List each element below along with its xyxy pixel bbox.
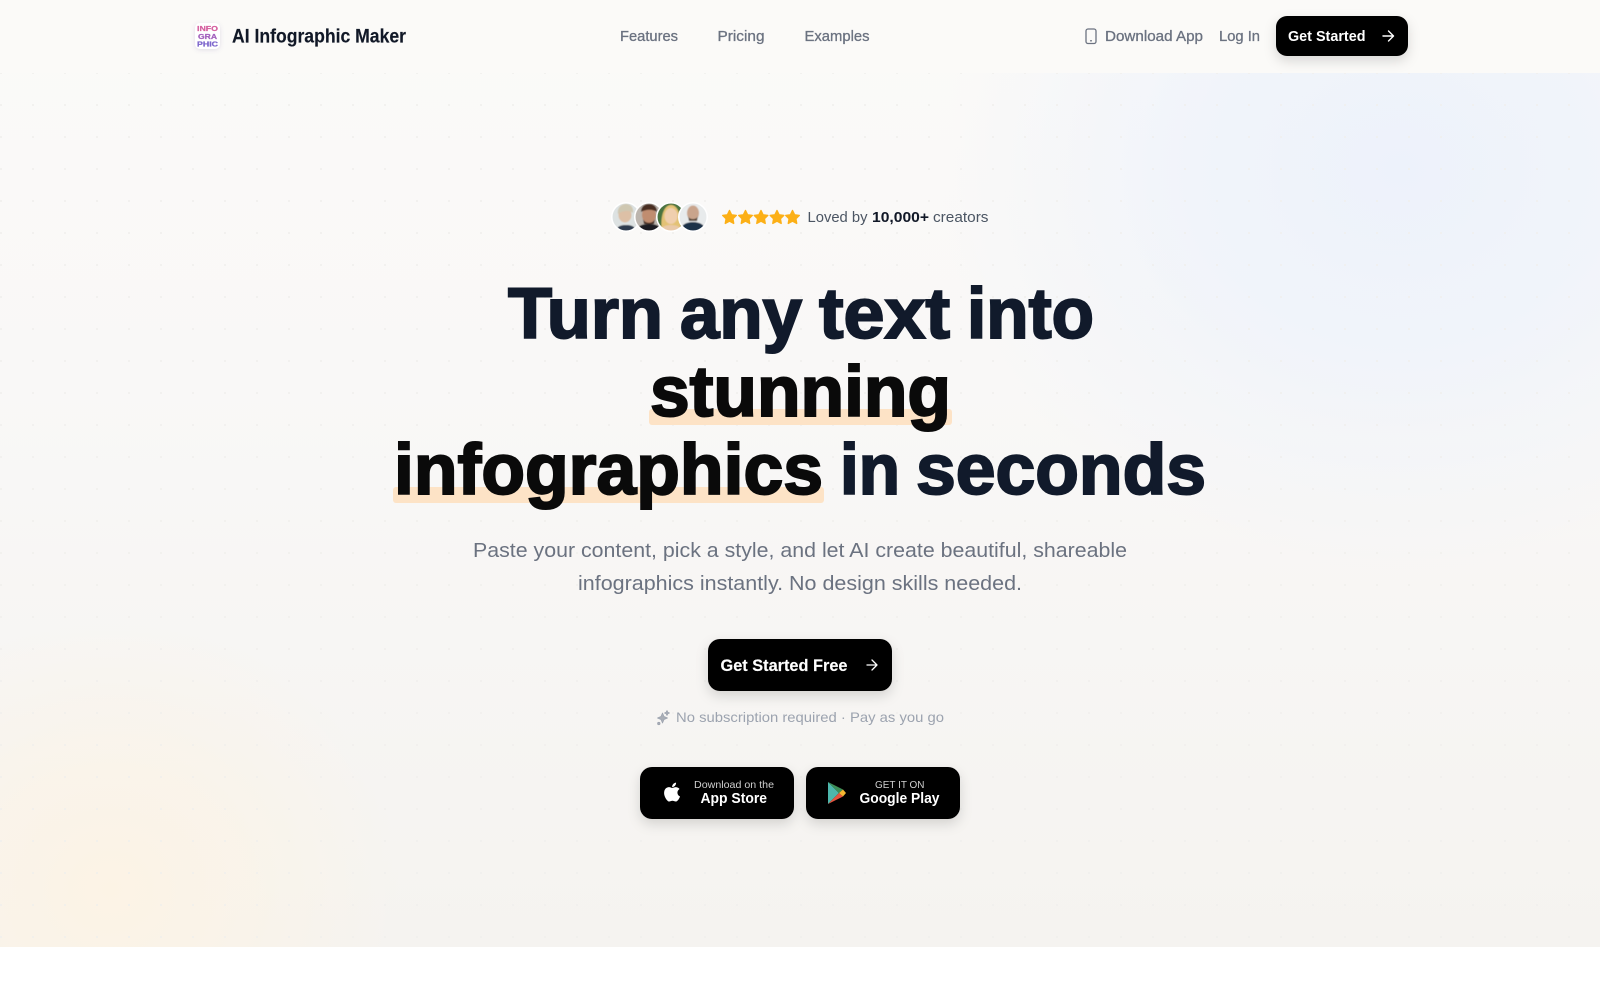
subtitle text: Paste your content, pick a style, and let AI create beautiful, shareable	[473, 540, 1127, 562]
button: App Store	[640, 767, 794, 819]
title: seconds	[916, 431, 1206, 510]
logo: INFO	[197, 24, 218, 33]
loved by text: creators	[933, 210, 988, 226]
button: Google Play: Google Play	[860, 791, 940, 807]
title: stunning	[650, 353, 951, 432]
nav link: Download App: Download App	[1105, 29, 1203, 45]
loved by text: 10,000+	[872, 210, 929, 226]
icon: apple	[664, 783, 680, 802]
logo: GRA	[198, 32, 218, 41]
button: Get Started Free	[708, 639, 892, 691]
subtitle text	[473, 540, 1127, 595]
title: infographics	[394, 431, 823, 510]
title: into	[967, 275, 1094, 354]
logo: PHIC	[197, 40, 219, 49]
nav link: Examples: Examples	[804, 29, 870, 45]
icon: play triangle	[828, 782, 846, 804]
nav link: Features: Features	[620, 29, 678, 45]
button: App Store: Download on the	[694, 779, 774, 791]
title: any	[680, 275, 803, 354]
note: no subscription: No subscription required · Pay as you go	[676, 709, 944, 725]
social proof row	[612, 204, 988, 230]
avatars	[612, 204, 706, 230]
icon: sparkles	[658, 710, 670, 725]
nav link: Log In: Log In	[1219, 29, 1260, 45]
button: Get Started Free: Get Started Free	[720, 657, 848, 675]
brand name: AI Infographic Maker	[232, 26, 407, 48]
logo	[195, 23, 220, 49]
title: in	[840, 431, 900, 510]
title	[393, 275, 1206, 510]
loved by text: Loved by	[808, 210, 868, 226]
nav link: Pricing: Pricing	[718, 29, 764, 45]
button: App Store: App Store	[700, 791, 767, 807]
navigation bar	[0, 0, 1600, 73]
title: text	[819, 275, 950, 354]
subtitle text: infographics instantly. No design skills needed.	[578, 573, 1022, 595]
button: Get Started: Get Started	[1288, 29, 1366, 45]
star rating	[723, 210, 799, 223]
button: Google Play	[806, 767, 960, 819]
loved by text	[808, 210, 988, 226]
title: Turn	[508, 275, 663, 354]
button: Google Play: GET IT ON	[875, 779, 924, 791]
button: Get Started	[1276, 16, 1408, 56]
icon: phone	[1086, 29, 1096, 44]
